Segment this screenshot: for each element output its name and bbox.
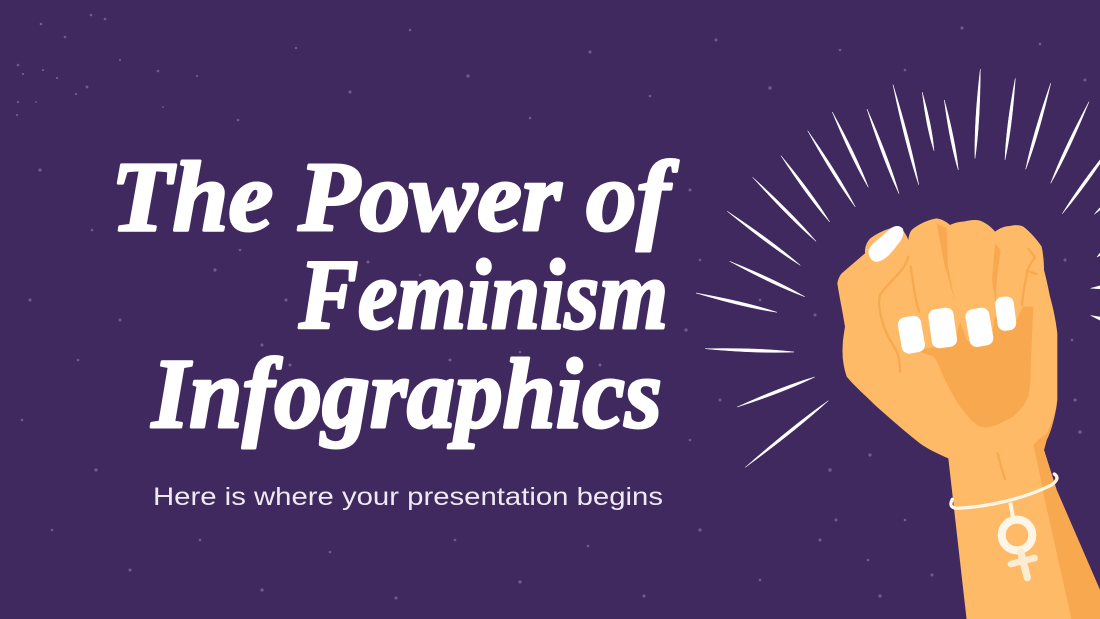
finger creases [937,223,1001,305]
bracelet [951,474,1057,508]
icon: radiating rays around fist [696,69,1100,467]
title line 1: The Power of [111,141,679,252]
title: The Power of Feminism Infographics [111,141,679,449]
palm shadow [917,307,1033,427]
wrist and forearm shadow [1033,402,1100,619]
title line 2: Feminism [298,239,668,350]
subtitle: Here is where your presentation begins [153,483,663,511]
nails [868,226,1017,355]
arm and hand silhouette [837,218,1100,619]
venus symbol pendant [1002,503,1035,578]
title line 3: Infographics [151,338,662,449]
icon: raised fist with bracelet [837,218,1100,619]
